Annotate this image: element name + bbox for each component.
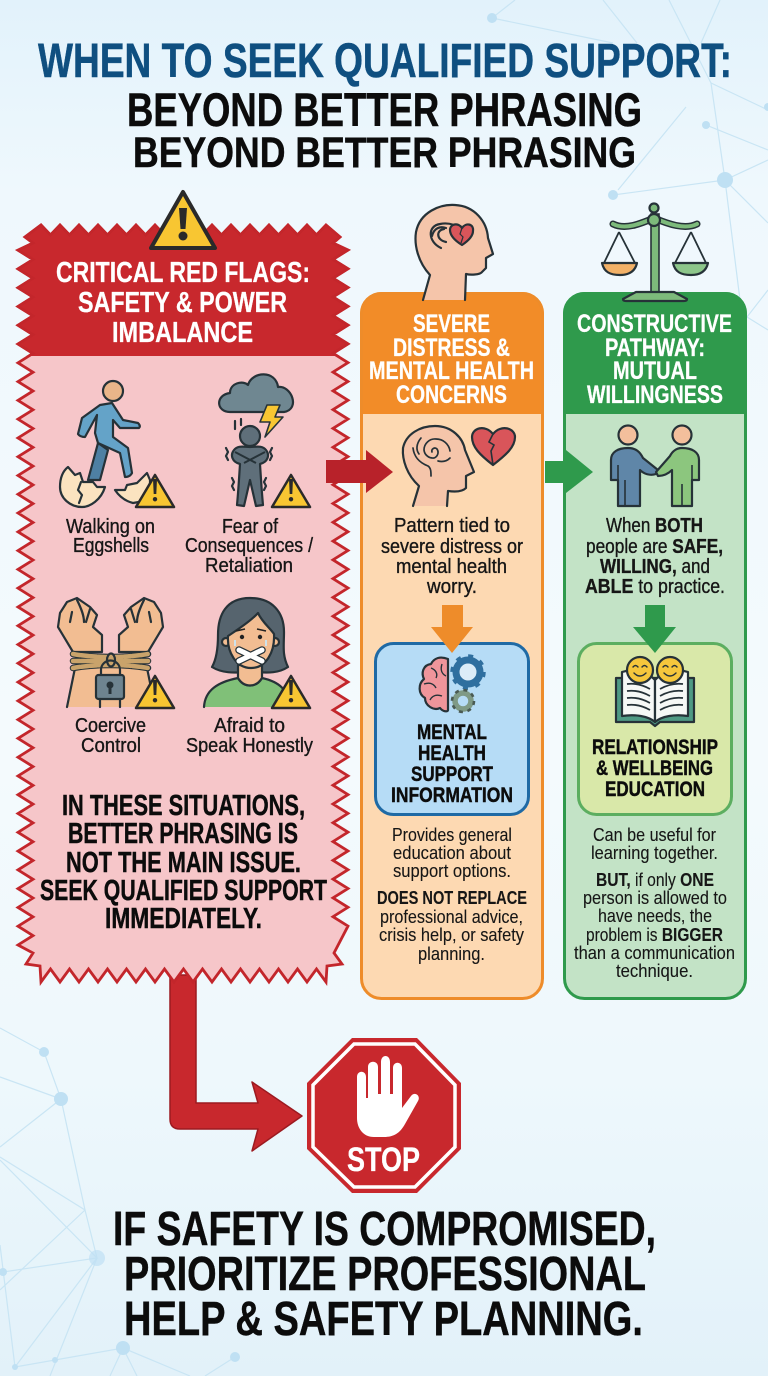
- heading: severe distress: MENTAL HEALTH: [369, 357, 534, 385]
- icon: main warning triangle: [151, 192, 215, 248]
- text: both people willing: people are SAFE,: [586, 536, 723, 558]
- callout: seek qualified support: IMMEDIATELY.: [105, 903, 262, 935]
- label: walking on eggshells: Walking on: [66, 516, 155, 538]
- arrow: orange to green panel: [545, 450, 593, 493]
- text: learning together note: technique.: [616, 961, 693, 981]
- text: pattern tied to distress: [381, 515, 523, 598]
- icon: fear of consequences: [219, 374, 310, 507]
- text: pattern tied to distress: Pattern tied to: [394, 515, 510, 537]
- heading: constructive pathway: MUTUAL: [613, 357, 697, 385]
- text: learning together note: than a communication: [574, 943, 735, 963]
- text: learning together note: learning together.: [591, 843, 718, 863]
- text: learning together note: problem is BIGGER: [586, 925, 723, 945]
- title: BEYOND BETTER PHRASING: [133, 129, 636, 177]
- heading: critical red flags: SAFETY & POWER: [78, 287, 287, 319]
- text: pattern tied to distress: worry.: [426, 576, 477, 598]
- box: mental health support information: SUPPORT: [411, 763, 493, 786]
- text: both people willing: When BOTH: [606, 515, 703, 537]
- label: coercive control: [75, 715, 146, 757]
- text: support options note: crisis help, or safety: [379, 925, 524, 945]
- label: fear of consequences: Retaliation: [205, 555, 293, 577]
- text: both people willing: ABLE to practice.: [585, 576, 725, 598]
- title: [38, 35, 732, 177]
- arrow: green down: [633, 605, 676, 653]
- text: learning together note: person is allowed to: [583, 888, 727, 908]
- icon: handshake: [611, 426, 699, 506]
- text: both people willing: WILLING, and: [600, 556, 710, 578]
- box: mental health support information: [376, 644, 528, 814]
- icon: coercive control: [58, 598, 174, 708]
- box: mental health support information: MENTAL: [417, 721, 487, 744]
- text: support options note: education about: [393, 843, 511, 863]
- icon: head with heart: [416, 205, 493, 300]
- box: relationship education: & WELLBEING: [596, 757, 713, 780]
- heading: critical red flags: IMBALANCE: [112, 317, 253, 349]
- heading: constructive pathway: PATHWAY:: [605, 334, 705, 362]
- label: afraid to speak honestly: Speak Honestly: [186, 735, 313, 757]
- callout: seek qualified support: SEEK QUALIFIED SUPPORT: [40, 875, 327, 907]
- text: support options note: professional advice,: [380, 907, 523, 927]
- label: coercive control: Coercive: [75, 715, 146, 737]
- text: learning together note: Can be useful for: [593, 825, 716, 845]
- box: relationship education: RELATIONSHIP: [592, 736, 718, 759]
- label: fear of consequences: Fear of: [222, 516, 278, 538]
- text: learning together note: BUT, if only ONE: [596, 870, 714, 890]
- icon: stop sign: [307, 1038, 461, 1193]
- icon: walking on eggshells: [60, 381, 174, 507]
- heading: severe distress: SEVERE: [413, 310, 490, 338]
- heading: critical red flags: CRITICAL RED FLAGS:: [56, 257, 310, 289]
- icon: stop sign: STOP: [347, 1141, 420, 1179]
- text: support options note: [377, 825, 527, 964]
- label: afraid to speak honestly: Afraid to: [214, 715, 285, 737]
- icon: afraid to speak honestly: [204, 598, 310, 708]
- label: fear of consequences: [185, 516, 313, 577]
- callout: seek qualified support: IN THESE SITUATIONS,: [62, 790, 305, 822]
- box: relationship education: EDUCATION: [605, 778, 705, 801]
- text: support options note: DOES NOT REPLACE: [377, 888, 527, 908]
- box: mental health support information: HEALTH: [418, 742, 486, 765]
- text: support options note: Provides general: [392, 825, 512, 845]
- heading: severe distress: [369, 310, 534, 409]
- callout: seek qualified support: NOT THE MAIN ISSUE.: [66, 847, 301, 879]
- label: fear of consequences: Consequences /: [185, 535, 313, 557]
- conclusion text: PRIORITIZE PROFESSIONAL: [124, 1248, 646, 1301]
- arrow: orange down: [431, 605, 473, 653]
- panel: critical red flags: [18, 192, 348, 982]
- conclusion text: HELP & SAFETY PLANNING.: [124, 1293, 643, 1346]
- text: learning together note: [574, 825, 735, 981]
- text: support options note: planning.: [418, 944, 485, 964]
- panel: severe distress: [362, 205, 542, 998]
- heading: critical red flags: [56, 257, 310, 349]
- icon: open book with smiles: [616, 657, 694, 726]
- heading: severe distress: DISTRESS &: [393, 334, 510, 362]
- heading: constructive pathway: WILLINGNESS: [587, 381, 723, 409]
- label: walking on eggshells: Eggshells: [73, 535, 149, 557]
- text: both people willing: [585, 515, 725, 598]
- callout: seek qualified support: [40, 790, 327, 935]
- box: mental health support information: INFORMATION: [391, 784, 513, 807]
- icon: balance scales: [602, 204, 708, 301]
- box: relationship education: [578, 644, 732, 814]
- text: pattern tied to distress: severe distress or: [381, 536, 523, 558]
- arrow: red elbow to stop sign: [170, 975, 302, 1151]
- label: afraid to speak honestly: [186, 715, 313, 757]
- text: pattern tied to distress: mental health: [396, 556, 507, 578]
- arrow: red to orange panel: [326, 450, 393, 493]
- label: coercive control: Control: [81, 735, 141, 757]
- panel: constructive pathway: [564, 204, 746, 998]
- callout: seek qualified support: BETTER PHRASING IS: [68, 818, 298, 850]
- label: walking on eggshells: [66, 516, 155, 557]
- text: support options note: support options.: [393, 861, 511, 881]
- heading: severe distress: CONCERNS: [396, 381, 507, 409]
- text: learning together note: have needs, the: [598, 906, 712, 926]
- heading: constructive pathway: [577, 310, 732, 409]
- icon: brain and gears: [420, 656, 484, 712]
- icon: head with spiral and broken heart: [403, 426, 515, 506]
- conclusion text: [113, 1203, 656, 1346]
